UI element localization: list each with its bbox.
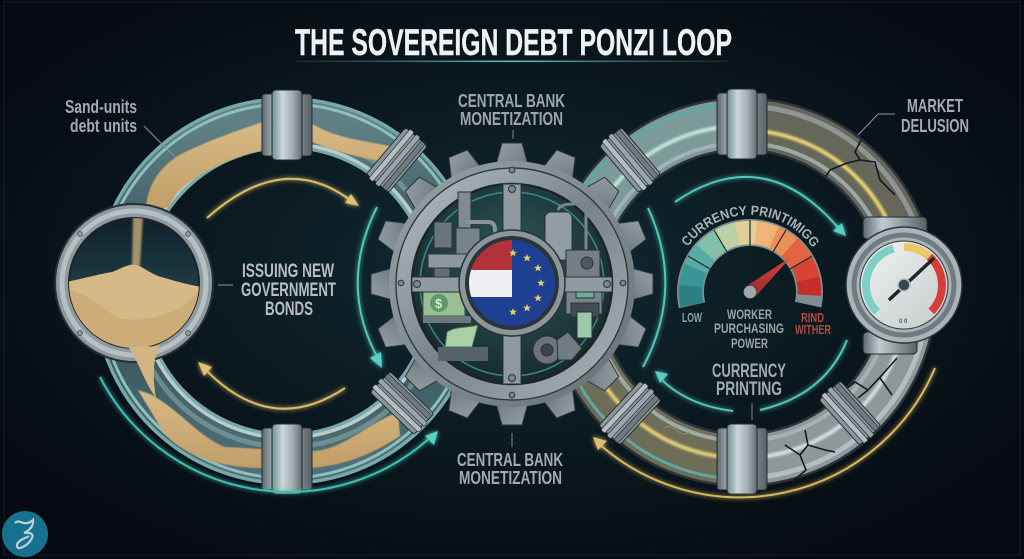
label: rind wither: WITHER [795,322,831,337]
pipe quadrant tones [574,124,910,460]
needle [745,257,791,297]
left glass pipe loop [100,104,474,478]
dial colour arc [850,231,958,339]
teal arrow: upper right loop [675,177,846,236]
label: issuing new government bonds: BONDS [265,299,313,320]
label: market delusion: DELUSION [901,116,969,136]
EU stars [509,249,545,315]
pressure gauge on pipe [846,217,962,354]
large inflation gauge [677,206,823,308]
label: central bank monetization bottom: CENTRAL BANK [457,450,563,470]
gear teeth [371,143,653,425]
pipe couplings [262,89,882,494]
central flag medallion [459,230,565,336]
bolts [398,167,626,398]
label: currency printing: CURRENCY [712,361,786,382]
gauge dividers [688,220,812,269]
label: central bank monetization top: MONETIZATION [460,109,563,129]
gold arrow: upper left loop [207,179,359,218]
teal arc: right of gear [643,208,665,367]
label: worker purchasing power: PURCHASING [714,320,784,336]
label: issuing new government bonds: ISSUING NEW [242,261,334,282]
sand stream [129,345,160,398]
banknote [423,288,488,361]
machinery left [428,192,495,280]
gold arrow: lower left loop [198,362,345,409]
machinery right [533,204,602,364]
dial needle [889,258,934,300]
sand in lower pipe [138,390,400,468]
pipe highlights [574,124,910,460]
label: issuing new government bonds [218,261,336,320]
teal arrow: outer lower left [100,377,438,492]
label: currency printing [712,361,786,420]
right metal pipe loop [554,104,930,482]
label: issuing new government bonds: GOVERNMENT [241,280,336,301]
label: currency printing: PRINTING [716,379,782,400]
sand in upper pipe [146,122,398,208]
label: sand units: debt units [70,116,137,136]
teal arrow: lower right loop [655,340,847,411]
pipe rim light [554,104,930,480]
label: worker purchasing power: WORKER [727,306,772,322]
gold arrow: outer right [593,368,935,497]
porthole: sand reservoir [55,204,213,398]
label: worker purchasing power [714,306,784,351]
label: worker purchasing power: POWER [731,335,768,351]
label: sand units [65,97,175,157]
title: THE SOVEREIGN DEBT PONZI LOOP [295,22,732,63]
pressure gauge on pipe: 0 0 [899,319,908,325]
label: central bank monetization top: CENTRAL BANK [458,91,565,111]
curved gauge title: CURRENCY PRINTIMIGG [682,206,818,246]
pipe cracks [665,140,897,482]
label: rind wither [795,310,831,337]
label: central bank monetization bottom [457,433,563,488]
logo badge [2,511,48,557]
label: market delusion: MARKET [907,96,963,116]
label: central bank monetization bottom: MONETIZATION [459,468,562,488]
label: sand units: Sand-units [65,97,137,117]
central gear machine [371,143,653,425]
label: central bank monetization top [458,91,565,139]
label: rind wither: RIND [801,310,824,325]
gauge colour band [666,208,834,376]
teal arrow: left of gear [358,207,382,368]
gear spokes [412,184,612,384]
label: low: LOW [682,310,702,325]
banknote: $ [435,296,443,311]
label: market delusion [858,96,969,136]
